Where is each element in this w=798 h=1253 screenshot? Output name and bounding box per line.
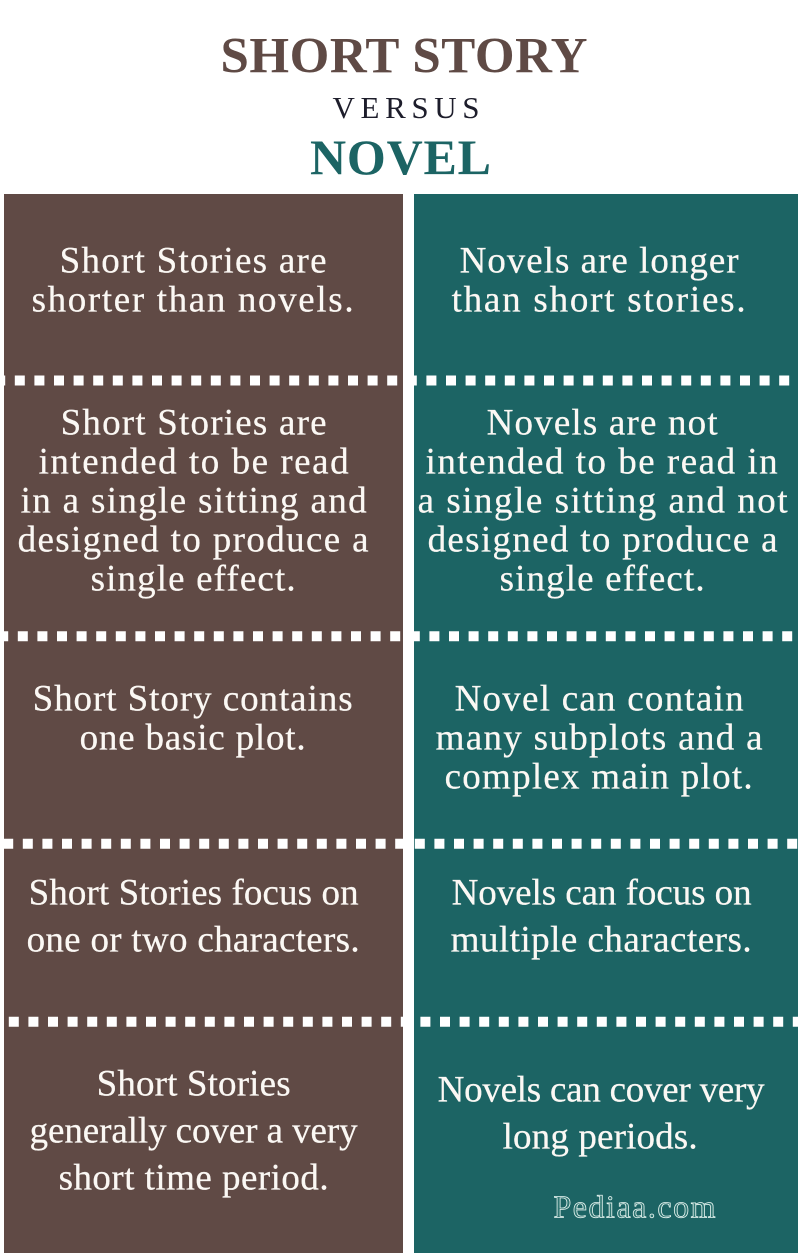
- heading: short story: SHORT STORY: [220, 28, 588, 84]
- text: short story time period: generally cover a very: [30, 1111, 358, 1152]
- text: novel purpose: [418, 403, 788, 600]
- text: novel purpose: designed to produce a: [428, 520, 778, 561]
- panel: short story column: [4, 194, 403, 1253]
- text: short story length: shorter than novels.: [32, 280, 354, 321]
- panel: novel column: [414, 194, 798, 1253]
- heading: versus: VERSUS: [332, 90, 480, 125]
- text: novel plot: many subplots and a: [436, 718, 763, 759]
- title block: [220, 28, 588, 185]
- text: short story purpose: single effect.: [91, 559, 296, 600]
- text: novel purpose: single effect.: [500, 559, 705, 600]
- row divider 1: [0, 376, 798, 386]
- row divider 4: [9, 1017, 798, 1027]
- text: short story purpose: in a single sitting and: [21, 481, 367, 522]
- text: novel time period: [438, 1070, 765, 1158]
- text: short story time period: [30, 1064, 358, 1199]
- text: novel length: Novels are longer: [460, 241, 739, 282]
- text: novel time period: Novels can cover very: [438, 1070, 765, 1111]
- text: novel purpose: intended to be read in: [426, 442, 778, 483]
- text: short story purpose: Short Stories are: [61, 403, 327, 444]
- text: short story characters: Short Stories focus on: [29, 873, 359, 914]
- row divider 2: [0, 631, 798, 641]
- text: short story length: [32, 241, 354, 321]
- text: novel purpose: a single sitting and not: [418, 481, 788, 522]
- text: short story characters: [27, 873, 360, 961]
- text: novel characters: Novels can focus on: [452, 873, 752, 914]
- text: novel purpose: Novels are not: [487, 403, 718, 444]
- text: short story plot: one basic plot.: [80, 718, 306, 759]
- text: novel plot: Novel can contain: [455, 679, 744, 720]
- text: short story purpose: [18, 403, 369, 600]
- heading: novel: NOVEL: [310, 129, 491, 185]
- text: short story plot: Short Story contains: [33, 679, 353, 720]
- text: short story characters: one or two characters.: [27, 920, 360, 961]
- text: novel characters: [451, 873, 752, 961]
- text: novel length: [452, 241, 746, 321]
- watermark: Pediaa.com: Pediaa.com: [554, 1188, 716, 1224]
- text: short story time period: Short Stories: [97, 1064, 291, 1105]
- text: novel plot: [436, 679, 763, 798]
- text: short story purpose: designed to produce a: [18, 520, 369, 561]
- text: short story plot: [33, 679, 353, 759]
- text: short story purpose: intended to be read: [39, 442, 349, 483]
- row divider 3: [3, 839, 798, 849]
- text: novel characters: multiple characters.: [451, 920, 752, 961]
- text: short story time period: short time period.: [59, 1158, 329, 1199]
- text: novel length: than short stories.: [452, 280, 746, 321]
- text: short story length: Short Stories are: [60, 241, 327, 282]
- text: novel plot: complex main plot.: [445, 757, 753, 798]
- text: novel time period: long periods.: [503, 1117, 698, 1158]
